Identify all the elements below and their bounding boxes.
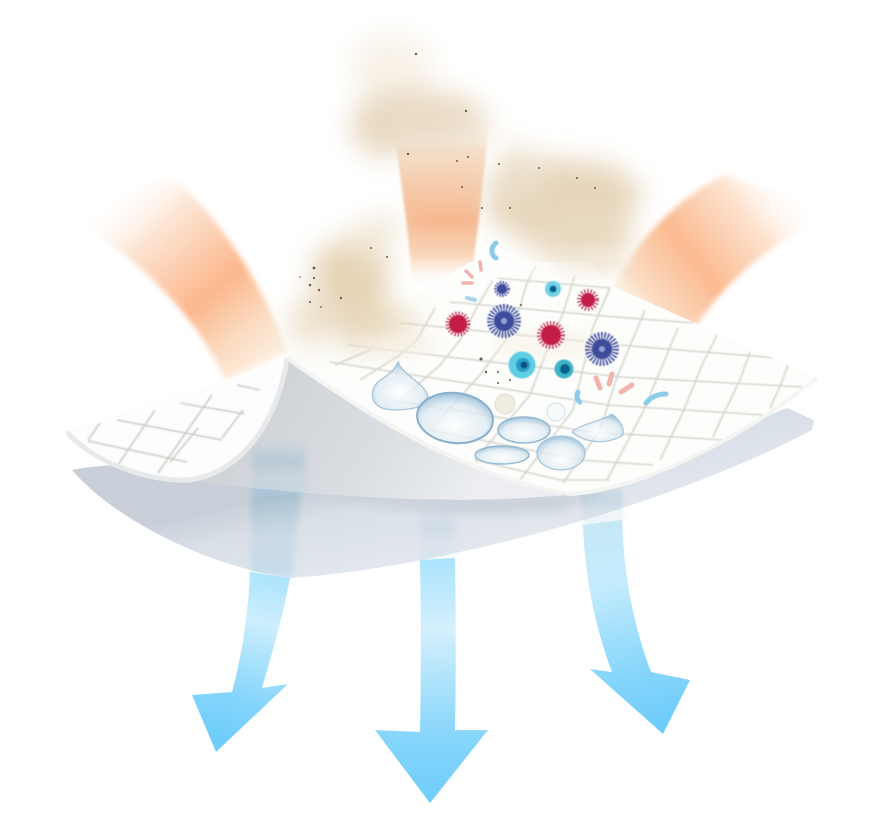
germ: teal bbox=[554, 360, 574, 378]
germ: cyan top bbox=[545, 281, 561, 297]
drop: small beige bbox=[495, 394, 515, 414]
germ: large blue left bbox=[491, 308, 517, 334]
quilting lines bbox=[330, 263, 802, 483]
germ: large blue right bbox=[589, 336, 615, 362]
drop: flat bbox=[475, 446, 529, 464]
bacteria: pink rods top bbox=[463, 262, 481, 283]
germ: red top bbox=[579, 291, 597, 309]
heat band: centre bbox=[393, 125, 488, 285]
drop: small clear bbox=[547, 403, 565, 421]
drop: round bbox=[537, 436, 585, 470]
water drops bbox=[372, 362, 623, 470]
arrow: left bbox=[192, 572, 290, 752]
drop: teardrop bbox=[372, 362, 428, 410]
drop: medium bbox=[498, 417, 550, 443]
germ: small navy bbox=[496, 282, 508, 296]
flap curled edge bbox=[67, 358, 287, 480]
heat band: left bbox=[80, 181, 288, 380]
dust cloud: right bbox=[482, 151, 638, 270]
blue stain: left column bbox=[250, 445, 306, 578]
dust cloud: top bbox=[348, 34, 492, 156]
lower absorbent sheet bbox=[72, 408, 814, 578]
gray underside of the folded layer bbox=[185, 358, 570, 500]
left folded flap bbox=[67, 358, 287, 480]
drop: right bbox=[572, 414, 623, 442]
sheet front edge bbox=[287, 358, 817, 494]
dust haze over back of sheet bbox=[360, 250, 630, 359]
dust cloud: left bbox=[286, 214, 411, 350]
quilting highlight bbox=[331, 304, 803, 442]
blue stain: right column bbox=[580, 480, 624, 528]
arrow: right bbox=[583, 520, 690, 734]
germ: large cyan bbox=[508, 352, 536, 378]
top quilted sheet bbox=[287, 262, 817, 494]
germ: red centre bbox=[540, 324, 562, 346]
arrow: centre bbox=[375, 558, 488, 803]
germs bbox=[448, 281, 615, 378]
bacteria bbox=[463, 243, 666, 403]
bacteria: pink rods right bbox=[596, 374, 632, 392]
drop: large bbox=[415, 389, 495, 447]
sheet quilting bbox=[330, 263, 803, 483]
blue stain: centre column bbox=[420, 505, 456, 562]
blue stain on underside bbox=[252, 440, 306, 493]
bacteria: blue crescents bbox=[492, 243, 666, 403]
heat band: right bbox=[610, 175, 835, 328]
dust specks bbox=[299, 53, 596, 384]
lower sheet: shadow under top layer bbox=[300, 485, 620, 511]
flap quilting bbox=[88, 385, 260, 473]
germ: red left bbox=[448, 314, 468, 334]
bacteria: blue mark bbox=[467, 298, 475, 300]
